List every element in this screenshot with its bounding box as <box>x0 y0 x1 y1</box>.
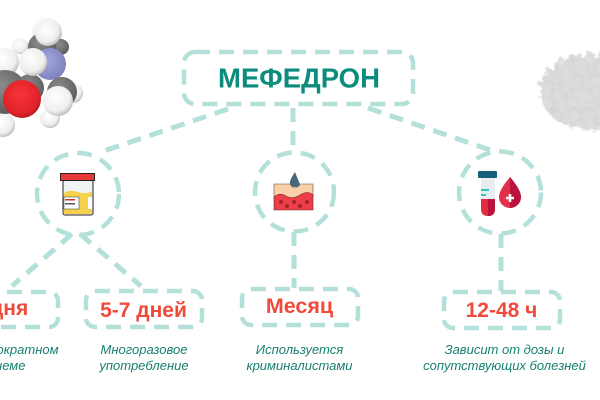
box: month <box>242 289 358 325</box>
note: repeated use: Многоразовое <box>101 342 187 357</box>
note: forensics: криминалистами <box>246 358 353 373</box>
icon: powder pile <box>540 54 600 130</box>
title box <box>184 52 413 104</box>
box: month: Месяц <box>266 294 334 318</box>
box: 1-3 days <box>0 292 58 327</box>
title: МЕФЕДРОН <box>218 62 380 94</box>
circle: hair and skin <box>255 152 334 232</box>
box: 12-48 hours <box>444 292 560 328</box>
icon: blood test tube and drop <box>478 171 521 216</box>
connectors <box>12 108 501 291</box>
note: repeated use: употребление <box>98 358 189 373</box>
box: 12-48 hours: 12-48 ч <box>466 299 537 322</box>
box: 5-7 days <box>86 291 202 327</box>
circle: urine test <box>37 153 119 235</box>
circle: blood test <box>459 152 541 234</box>
note: forensics: Используется <box>256 342 343 357</box>
icon: urine sample jar <box>60 174 94 215</box>
box: 5-7 days: 5-7 дней <box>100 299 187 322</box>
note: dose dependence: сопутствующих болезней <box>423 358 586 373</box>
icon: mephedrone molecule <box>0 18 83 137</box>
note: dose dependence: Зависит от дозы и <box>445 342 564 357</box>
icon: skin cross-section with hair <box>274 172 313 210</box>
